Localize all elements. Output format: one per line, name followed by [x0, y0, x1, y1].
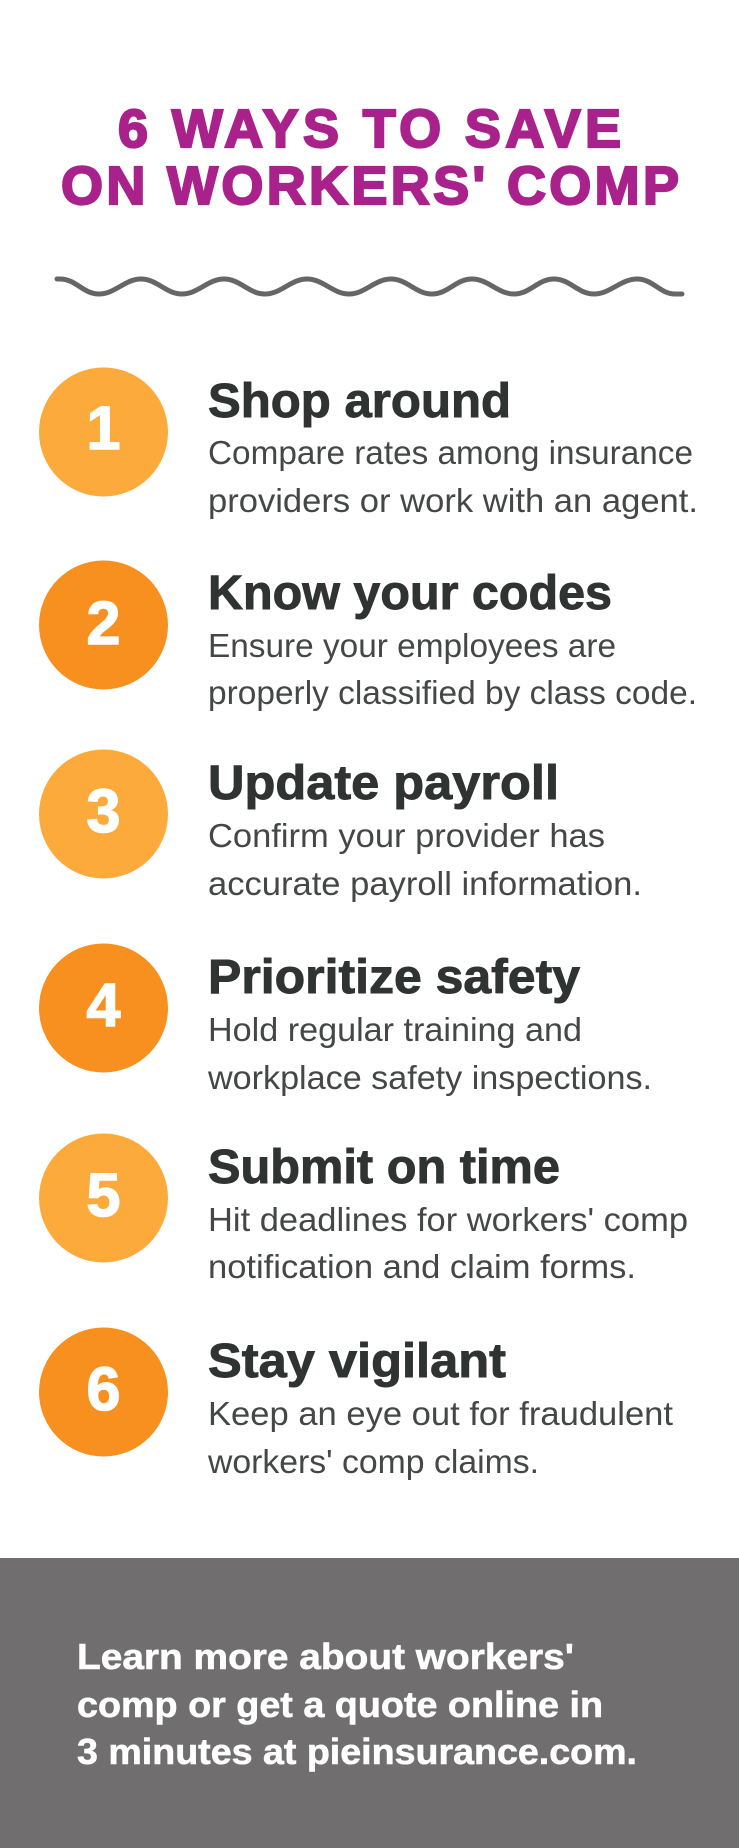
step 6 heading: Stay vigilant — [208, 1335, 506, 1388]
step 2 description — [208, 627, 697, 711]
number badge 4 — [39, 944, 168, 1072]
number badge 1 — [39, 368, 168, 496]
number badge 3 — [39, 750, 168, 878]
step 2 heading: Know your codes — [208, 567, 612, 620]
step 4 heading: Prioritize safety — [208, 951, 580, 1004]
number badge 5 — [39, 1134, 168, 1262]
title — [61, 99, 679, 216]
step 3 — [39, 750, 642, 902]
step 4 description — [207, 1011, 652, 1096]
step 2 — [39, 560, 697, 711]
footer call to action: 3 minutes at pieinsurance.com. — [77, 1731, 637, 1772]
footer call to action: comp or get a quote online in — [77, 1684, 603, 1725]
title: 6 WAYS TO SAVE — [118, 99, 621, 159]
footer panel — [0, 1558, 739, 1848]
step 1 description — [208, 434, 698, 519]
step 4 — [39, 944, 652, 1096]
number badge 5: 5 — [87, 1161, 120, 1229]
step 5 heading: Submit on time — [208, 1141, 560, 1194]
step 5 description: notification and claim forms. — [208, 1248, 636, 1285]
step 4 description: workplace safety inspections. — [207, 1059, 652, 1096]
step 1 — [39, 368, 698, 519]
step 5 description: Hit deadlines for workers' comp — [208, 1201, 688, 1238]
step 6 description — [207, 1395, 673, 1480]
step 6 description: workers' comp claims. — [207, 1443, 539, 1480]
step 1 description: Compare rates among insurance — [208, 434, 693, 471]
number badge 6 — [39, 1328, 168, 1456]
number badge 2 — [39, 560, 168, 690]
step 3 description — [208, 817, 642, 902]
step 3 description: Confirm your provider has — [208, 817, 605, 854]
step 6 description: Keep an eye out for fraudulent — [208, 1395, 673, 1432]
footer call to action: Learn more about workers' — [77, 1636, 574, 1677]
step 3 heading: Update payroll — [208, 757, 559, 810]
number badge 4: 4 — [87, 971, 121, 1039]
step 2 description: properly classified by class code. — [208, 674, 697, 711]
step 4 description: Hold regular training and — [208, 1011, 582, 1048]
number badge 1: 1 — [87, 394, 120, 462]
wavy divider — [57, 279, 682, 294]
step 5 description — [208, 1201, 688, 1285]
step 6 — [39, 1328, 673, 1480]
number badge 6: 6 — [87, 1355, 120, 1423]
title: ON WORKERS' COMP — [61, 156, 679, 216]
step 1 description: providers or work with an agent. — [208, 482, 698, 519]
footer call to action — [77, 1636, 637, 1772]
number badge 2: 2 — [87, 589, 120, 657]
step 3 description: accurate payroll information. — [208, 865, 642, 902]
step 2 description: Ensure your employees are — [208, 627, 616, 664]
number badge 3: 3 — [87, 777, 120, 845]
step 5 — [39, 1134, 688, 1285]
step 1 heading: Shop around — [208, 375, 511, 428]
